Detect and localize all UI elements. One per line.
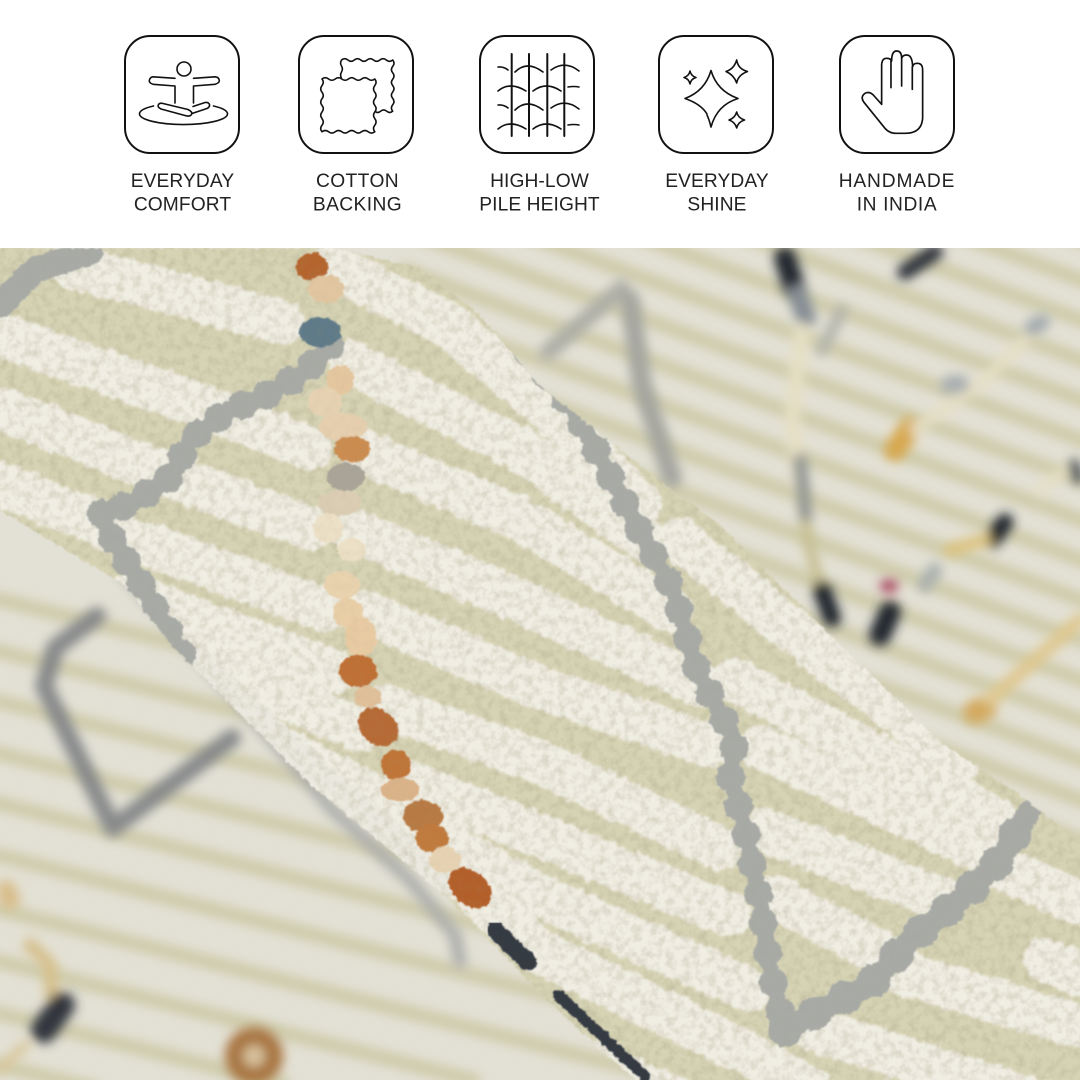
background motif: coloured knots — [0, 252, 1080, 1076]
rolled rug: in-focus section — [0, 248, 1080, 1080]
feature: cotton backing — [299, 36, 413, 216]
label: everyday shine: SHINE — [687, 194, 747, 216]
label: handmade in india: HANDMADE — [839, 171, 955, 192]
rug texture: loop pile grain — [0, 248, 1080, 1080]
panel: feature icons strip — [124, 35, 955, 216]
feature: high-low pile height — [479, 36, 600, 216]
label: everyday comfort: COMFORT — [134, 194, 231, 216]
feature: everyday comfort — [125, 36, 239, 216]
rug texture: surface grain over knots — [0, 248, 1080, 1080]
label: cotton backing: BACKING — [313, 194, 402, 216]
background motif: grey diamond lines — [44, 288, 672, 962]
icon: overlapping fabric swatches — [299, 36, 413, 153]
icon: seated meditation figure — [125, 36, 239, 153]
motif: grey knotted line across roll — [0, 252, 1030, 1030]
icon: open hand — [840, 36, 954, 153]
icon: woven pile threads — [480, 36, 594, 153]
motif: dark knots at roll edge — [495, 930, 645, 1076]
label: cotton backing: COTTON — [316, 171, 399, 192]
label: high-low pile height: HIGH-LOW — [490, 171, 589, 192]
feature: handmade in india — [839, 36, 955, 216]
label: high-low pile height: PILE HEIGHT — [479, 194, 600, 216]
icon: sparkles — [659, 36, 773, 153]
feature: everyday shine — [659, 36, 773, 216]
panel: close-up photo of rolled rug — [0, 248, 1080, 1080]
label: everyday shine: EVERYDAY — [665, 171, 769, 192]
rug lip: cream fringe on lower edge — [219, 692, 442, 892]
label: everyday comfort: EVERYDAY — [131, 171, 234, 192]
rug bands: cream pile stripes — [0, 266, 1080, 1080]
motif: orange and peach knots — [296, 253, 499, 916]
label: handmade in india: IN INDIA — [857, 194, 937, 216]
